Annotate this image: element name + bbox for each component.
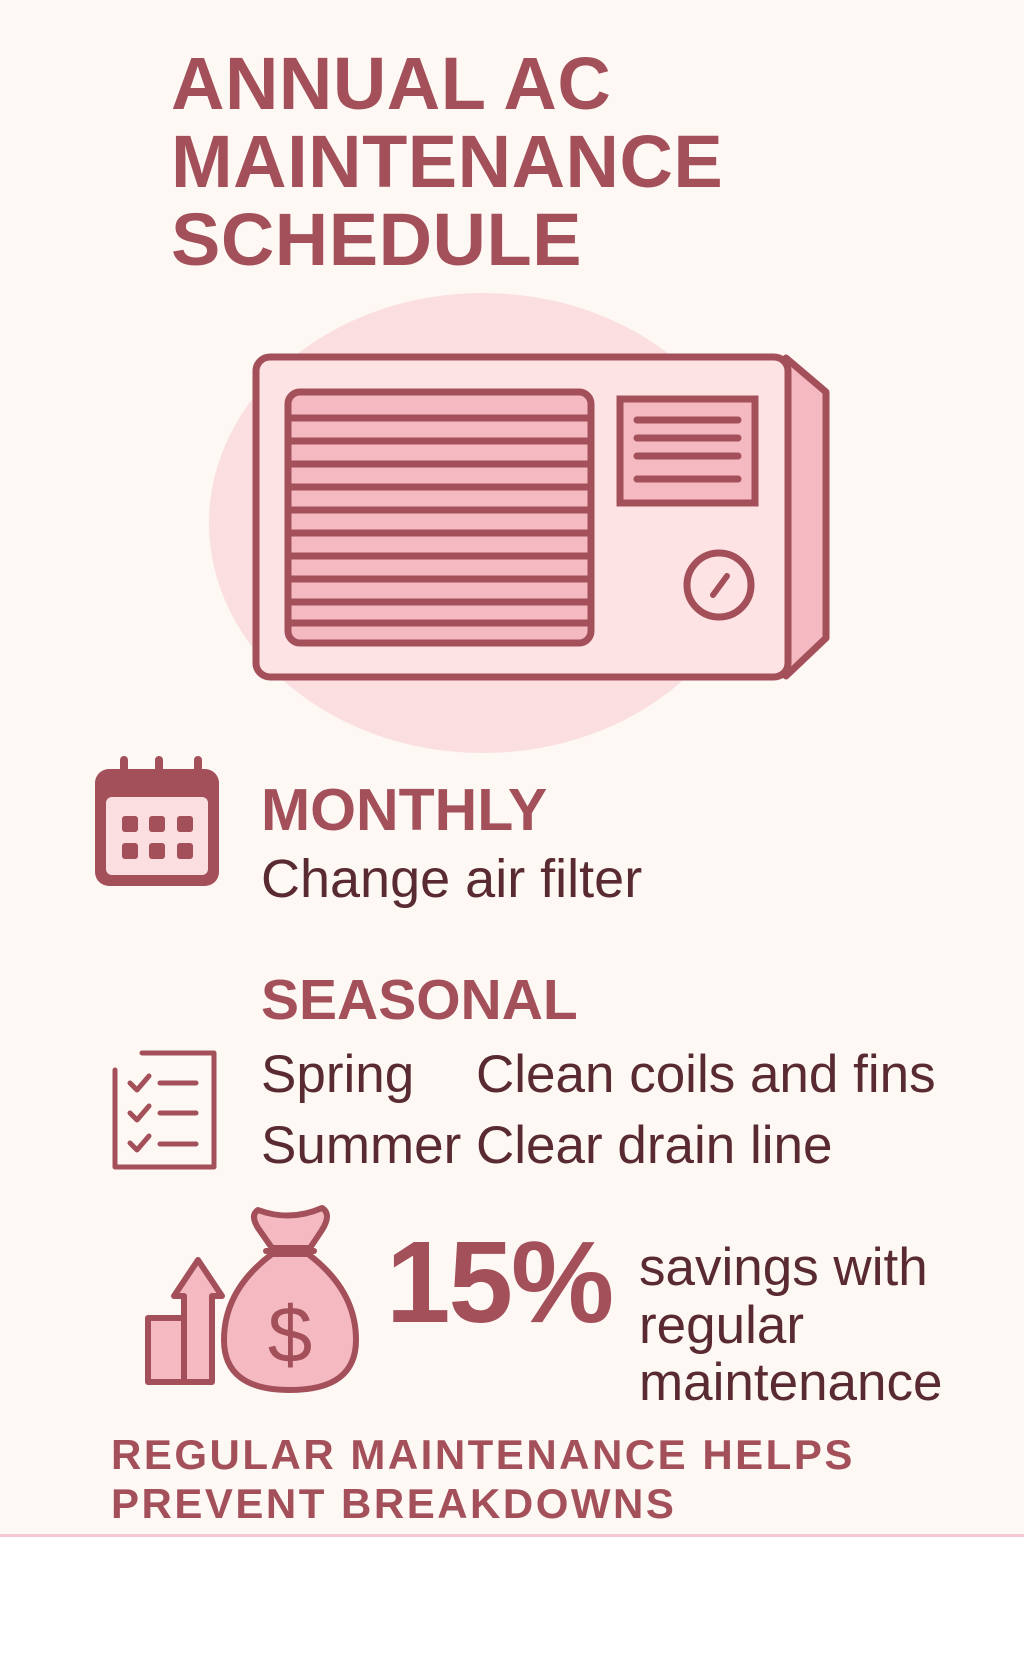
text: seasonal tasks: Spring (261, 1045, 414, 1104)
text: seasonal tasks (261, 1045, 936, 1175)
title: ANNUAL AC (171, 42, 611, 125)
title: SCHEDULE (171, 198, 582, 281)
icon: air conditioner (209, 293, 826, 753)
title (171, 42, 723, 281)
text: savings description: maintenance (639, 1353, 942, 1412)
heading: seasonal: SEASONAL (261, 968, 578, 1032)
icon: checklist (115, 1053, 214, 1167)
footer message (111, 1431, 855, 1527)
stat: 15%: 15% (386, 1217, 612, 1347)
text: savings description: savings with (639, 1238, 928, 1297)
icon: calendar (95, 756, 219, 886)
text: savings description: regular (639, 1296, 804, 1355)
text: savings description (639, 1238, 942, 1412)
text: monthly task: Change air filter (261, 849, 642, 909)
text: seasonal tasks: Summer (261, 1116, 461, 1175)
text: seasonal tasks: Clear drain line (476, 1116, 832, 1175)
footer message: PREVENT BREAKDOWNS (111, 1480, 676, 1527)
title: MAINTENANCE (171, 120, 723, 203)
icon: growth bars and money bag (148, 1208, 356, 1390)
footer message: REGULAR MAINTENANCE HELPS (111, 1431, 855, 1478)
heading: monthly: MONTHLY (261, 777, 547, 843)
text: $ (268, 1290, 312, 1379)
text: seasonal tasks: Clean coils and fins (476, 1045, 936, 1104)
